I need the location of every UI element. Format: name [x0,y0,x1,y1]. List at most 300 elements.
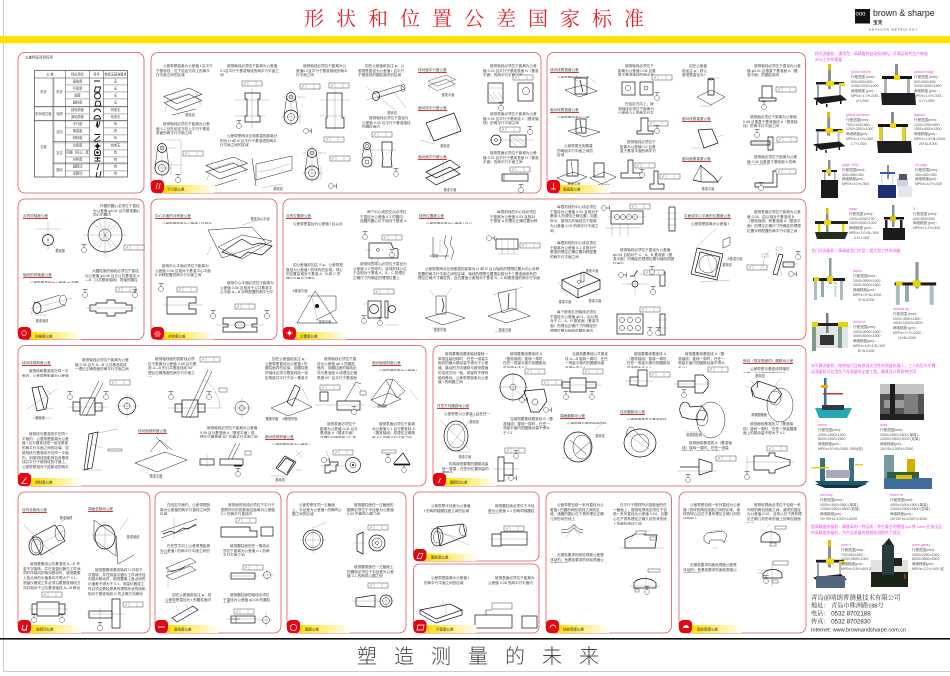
table: 圆跳动 [73,164,82,168]
drawing: connecting rod 1 [281,84,320,134]
drawing: flange [493,448,525,481]
drawing: hatched section [488,75,533,110]
heading and text [22,351,69,377]
table: 无 [114,80,118,84]
drawing: spindle [624,427,656,457]
badge: position: 位置度公差 [300,334,318,338]
specs 13: atlas 行程范围(mm)： 3000×1500×1600 (单臂) - 12000×3500×2000 (双臂) 两维精度(μm)： 15+25L/1000+L/3000 [880,423,920,451]
text: 被测圆锥面任一正截面上的圆周必须位于半径差为公差值 0.1 的两同心圆之间 [347,565,394,578]
drawing: position zone 2: 基准平面 [499,327,511,332]
table: 面轮廓度 [71,114,85,119]
drawing: tilted zone: A基准平面 [728,256,742,261]
badge: perpendicularity [547,180,610,193]
table: 有 [114,128,117,133]
table: 轮廓 [56,111,63,116]
specs 14: mercury 行程范围(mm)： 4000×1600×2800 (单臂) - 12000×2500×2800 (双臂) 两维精度(μm)： 10+25+5L/1000+L/4000 [820,493,860,521]
drawing: wheel [498,369,545,402]
heading and text: 点的位置度公差 [286,214,311,218]
badge: line profile [546,620,609,633]
drawing: plate with circle: 基准轴线 [127,534,140,539]
drawing: curved surface [704,531,728,548]
text: example 3: 被测轴线必须位于距离为公差值 0.2 且在给定方向上平行于基准表面的两平行平面之间 [156,122,210,135]
specs 2: global image 行程范围 (mm)： 500×500×500 - 2000×4000×1500 两维精度 (μm)： MPEe=1.5+L/333 - 4.7+L/250 [914,70,943,102]
machine 3 [813,112,845,153]
table: 全跳动 [73,170,82,176]
heading and text: 任意方向圆跳动公差 [437,404,469,408]
badge: straightness: 直线度公差 [174,626,192,632]
table: 有或无 [111,114,121,119]
drawing: tilted section [200,443,251,476]
text: 被测中心平面必须位于距离为公差值 0.08 且相对于基准中心平面 A 对称配置的两平行平面之间 [155,264,211,277]
drawing: 3D block: 基准平面 [559,299,571,304]
drawing: oblique rod [172,604,198,622]
text: 被测表面必须位于距离为公差值 0.05，由以相对于基准线 B（基准轴线）和基准面 A（基准平面）的理论正确尺寸所确定的理想位置对称配置的两平行平面之间 [747,210,801,233]
specs 15: bravo ht 行程范围(mm)： 4000×1400×1500 (单臂) - 12000×2000×2800 (双臂) 两维精度(μm)： 10+25+5L/1000+L/4000 [890,493,930,521]
heading and text [684,204,732,226]
yellow header band [0,36,950,43]
drawing: plates 2: 基准线 [440,143,451,148]
drawing: cylinder [30,295,72,323]
machine 5 [821,160,838,198]
drawing: 3D block [558,268,601,304]
heading and text [286,204,346,226]
specs 6: xb page 行程范围(mm)： 480×350×300 两维精度(μm)： MPEe=4.0+L/300 [915,163,942,186]
drawing: dome section [761,524,786,547]
drawing: cam [524,380,562,412]
drawing: squares [622,75,672,100]
drawing: cone right lower: 测量圆柱面 [686,432,702,437]
drawing: cone with cylinder: 基准线 [755,373,766,378]
heading and text: 斜向（规定角度的）圆跳动公差 [743,359,793,363]
heading and text [419,204,475,224]
machine 1 [813,64,847,107]
badge: parallelism [151,180,214,193]
drawing: slab [692,129,723,148]
table: 有 [114,135,117,140]
footer rule [0,638,950,640]
drawing: planes with axis: 基准线 [273,186,284,191]
drawing: cylinder on plane: A基准平面 [283,416,297,421]
machine 16 [813,540,847,588]
drawing: shaft with tilted plate [747,247,800,276]
machine 10 [895,262,936,305]
table: 有 [114,170,117,176]
drawing: paired zones [557,160,616,188]
heading and text: 径向圆跳动公差 [620,410,645,414]
badge: symmetry [151,327,214,340]
heading and text [550,58,590,78]
panel: runout [433,346,806,486]
specs 8: X 行程范围 (mm)： 600×800×600 两维精度 (μm)： MPEe=1.2+L/400 [913,207,940,230]
machine 9 [813,258,845,300]
heading and text: 面对线垂直度公差 [550,108,579,112]
drawing: ring on cylinder [562,424,606,462]
drawing: zone 2 [568,119,600,137]
drawing: cylinder on plane [265,384,312,421]
badge: cylindricity: 圆柱度公差 [431,554,449,560]
panel: straightness [155,492,281,633]
heading and text [743,349,793,373]
panel: flatness [414,564,539,633]
specs 4: ligature 行程范围(mm)： 1200×2000×800 - 1500×4000×1500 两维精度(μm)： MPEe=1.8+3L/1000 - 25+5L/1000 [914,113,947,146]
badge: parallelism: 平行度公差 [167,186,185,192]
machine 8 [883,205,905,240]
drawing: disc shaft [87,599,143,630]
badge: roundness: 圆度公差 [305,626,319,632]
logo: brown & sharpe: ooo [856,12,866,18]
drawing: tapered stud 2 [744,446,794,480]
text: 公差带是半径差为公差值 t 的两同轴圆柱面之间的区域 [424,504,471,513]
table: 有 [114,121,117,126]
heading and text: 中心平面的对称度公差 [155,214,191,218]
drawing: tilted cylinder: 基准线 [275,477,286,482]
badge: angularity: 倾斜度公差 [35,480,53,484]
table: 定向 [56,129,63,134]
drawing: plane zone right [371,379,418,408]
drawing: shaft [28,592,68,622]
machine 12 [815,378,852,418]
badge: roundness [287,620,350,633]
heading and text: 平面或中心平面的位置度公差 [684,214,731,218]
specs 17: pmm gantry 行程范围(mm)： 3000×2000×1000 - 8000×3800×2500 两维精度(μm)： MPEe=2.2+L/400 起 [912,543,944,571]
drawing: concentric circle: 基准圆 [55,248,65,253]
table: 位置 [40,144,47,149]
table: 跳动 [56,167,63,172]
text: 被测球的球心必须位于直径为公差值 0.3 的球内，该球的球心位于由相对于基准 A、B、C 的理论正确尺寸所确定的理想位置上 [353,262,407,280]
drawing: stud 2 [650,171,680,189]
drawing: stud [621,160,655,178]
drawing: plane zone right: 基准线 [377,403,388,408]
table: 垂直度 [73,128,83,133]
badge: runout [433,473,496,486]
text: 被测表面必须位于距离为公差值 0.08 的两平行平面内 [488,576,535,585]
drawing: shaft and flange [748,130,797,150]
panel: coaxiality [18,199,144,340]
table: 平面度 [73,86,83,90]
text: 被测要素绕基准轴线旋转一周或连续回转时，在任一测量平面内的最大跳动量不得大于公差值。跳动的方向通常与被测表面的法线方向一致。测量时不得有轴向移动，公差带是距离为公差值 t 的两圆之间 [438,352,488,384]
text: 每根刻线的中心线必须位于直径为公差值 0.05 且相对于基准 A 的理论正确位置，如图所示，被测孔的轴线位于距离为公差值 0.05 的两平行平面之间 [550,205,599,233]
drawing: tilted slab [82,429,122,470]
drawing: tilted zone: 基准线 [35,415,46,420]
photo: atlas [880,384,924,420]
drawing: cone right lower [680,402,725,438]
drawing: curve [561,524,583,537]
drawing: triangle planes: 基准平面 [319,319,331,324]
heading and text [23,263,81,283]
drawing: cylinder on plane [697,78,725,106]
heading and text: 面对面倾斜度公差 [372,361,401,365]
heading and text: plane to line: 面对线平行度公差 [418,106,447,110]
drawing: tilted zone [691,228,742,282]
panel: symbols table [18,52,144,193]
heading and text [265,425,311,445]
drawing: part with frame [235,81,269,128]
drawing: curve zone [161,518,197,538]
heading and text: 线对线倾斜度公差 [22,361,51,365]
heading and text: 点的同轴度公差 [23,214,48,218]
heading [156,58,216,65]
heading and text [155,204,215,224]
drawing: curve profile [430,235,454,260]
drawing: position zone 1: 基准平面 [434,327,446,332]
drawing: 3D block: 基准平面 [586,268,598,273]
drawing: stepped shaft [82,287,138,316]
drawing: paired zones: 基准平面 [598,183,610,188]
badge: surface profile [679,620,742,633]
drawing: tilted zone [27,386,57,420]
heading and text [620,400,670,420]
drawing: section bar [226,609,272,627]
drawing: peg on base [637,118,668,134]
drawing: concentric circle [36,222,65,253]
heading: gantry type: 龙门式测量机：高精度龙门大型、超大型工件的测量 [811,248,900,252]
drawing: 3D tolerance zone: 基准中心平面 [250,216,270,221]
badge: flatness: 平面度公差 [436,626,454,632]
table: 有或无基准要求 [104,72,127,76]
heading and text: 径向全跳动公差 [22,508,47,512]
drawing: triangle planes [293,288,339,324]
text: 被测面绕基准线 C（基准轴线）旋转一周时，在任一测量圆锥面上的跳动量不得大于 0.1 [743,422,797,435]
drawing: round stud [675,367,728,398]
drawing: 3D tolerance zone [207,216,272,259]
table: 平行度 [73,121,83,126]
contact information: 电话： 0532 8702188 [811,610,871,618]
text: 当被测要素绕基准线 B（基准轴线）旋转一周时，在任一测量平面内的圆跳动量不得大于 0.1 [503,417,553,435]
table: 无 [114,94,118,98]
drawing: plates 3: 基准平面 [444,187,456,192]
drawing: block with datum [362,232,402,262]
drawing: tilted zone: 基准线 [722,262,733,267]
drawing: ring on cylinder: 基准线 [595,433,606,438]
drawing: part side view [320,83,350,130]
specs 12: arrow 行程范围(mm)： 2000×1500×1400 - 6000×1500×2500 两维精度(μm)： MPEe=10+5L/1000 /25/5(双) [818,423,863,451]
panel: angularity [18,346,426,486]
drawing: curve profile: A基准 [430,253,439,258]
badge: straightness [155,620,218,633]
table: 特征项目 [71,72,84,76]
machine 17 [871,538,908,587]
heading and text: 面对线倾斜度公差 [265,435,294,439]
heading and text [550,98,592,118]
drawing: tolerance zone 3D [164,88,202,117]
drawing: slab on plane: 基准平面 [702,186,714,191]
drawing: small rod [360,132,398,176]
badge: perpendicularity: 垂直度公差 [563,186,581,192]
heading and text: 轴线的同轴度公差 [23,273,52,277]
table: 定位 [56,150,63,155]
specs 10: lambda sp 行程范围 (mm)： 2000×3500×1500 - 4000×10000×2500 两维精度 (μm)： MPEe=7+7L/1000 - 11+8L/1000 [893,307,923,340]
table: 线轮廓度 [71,107,85,112]
text: 公差带是在同一正截面上，半径差为公差值 t 的两同心圆之间的区域 [292,503,342,516]
drawing: plate with circle [92,518,140,564]
drawing: oblique cylinder: 基准线 [387,110,398,115]
drawing: plates 3 [426,160,460,192]
text: 被测要素绕基准轴线 D 作若干次旋转，并在测量仪器与工件间作径向相对移动时，被测要素上各点间的示值差不得大于 0.1，测量仪器或工件必须沿着轮廓具有理想形状的线和相对于基准轴线 D 的正确方向移动 [88,568,146,596]
drawing: cylinder: 基准轴线 [60,515,73,520]
drawing: step bar [221,518,273,537]
heading and text: 线对面倾斜度公差 [138,429,167,433]
title: 形状和位置公差国家标准 [304,8,656,30]
drawing: plane with zone [135,437,187,478]
drawing: slotted block [158,284,203,314]
drawing: square plate and knob [362,289,399,326]
specs 1: global dense 行程范围 (mm)： 500×500×500 - 1200×2000×1000 两维精度 (μm)： MPEe=1.0+L/330 - 4+L/300 [851,70,880,102]
machine 15 [884,455,932,489]
drawing: hole grid top [602,204,677,236]
drawing: plates 1 [428,75,455,97]
panel: perpendicularity [547,52,806,193]
text: right column 2: 被测表面必须位于距离为公差值 0.05 且平行于基准线 C（基准轴线）的两平行平面之间 [483,112,539,125]
table: 无 [114,86,118,90]
text: 公差带是距离为公差值 t 的两平行平面之间的区域 [424,576,469,585]
text: 被测轴线必须位于直径为公差值 φ0.01 且垂直于基准面 A（基准平面）的圆柱面内 [747,64,801,77]
drawing: taper with circle [352,583,394,608]
heading and text: 面对面垂直度公差 [682,157,711,161]
text: definition: 公差带是距离为公差值 t 且平行于基准线、位于给定方向上的两平行平面之间的区域 [156,64,213,77]
heading and text: 面对线垂直度公差 [682,117,711,121]
drawing: triangle planes: A基准平面 [293,288,307,293]
heading and text: 端面圆跳动公差 [560,414,585,418]
contact information: 青岛前哨朗普测量技术有限公司 [811,592,900,602]
heading and text [560,404,610,424]
badge: line profile: 线轮廓度公差 [563,626,584,632]
drawing: plates [166,558,196,588]
table: 倾斜度 [73,135,83,140]
table: 位置度 [73,142,83,148]
drawing: stepped pin [489,526,529,546]
badge: angularity [18,473,81,486]
contact information: 地址： 青岛市株洲路188号 [811,602,884,610]
right column: machines [811,51,948,634]
table: 同轴（同心）度 [66,150,89,154]
drawing: cone with circle [353,525,388,554]
panel: symmetry [151,199,277,340]
drawing: cylinder [431,524,469,546]
drawing: tolerance zone 3D: 基准线 [185,112,196,117]
drawing: paired zones: 基准平面 [568,181,580,186]
drawing: small stepped shaft [320,450,360,473]
heading and text: 线的位置度公差 [419,214,444,218]
drawing: shaft [559,369,603,400]
drawing: peg [759,86,796,110]
heading: ultra high precision: 超高精度测量机：精度高的一种品质，并在著名的德国 ppt 铁 cmm 应该出品的高精度测量机，为产品质量的规划检测提供了保证 [811,524,942,534]
logo: brown & sharpe: 宝克 [873,19,883,26]
drawing: oblique cylinder [365,81,406,115]
text: 被测面必须位于距离为公差值 0.08 且垂直于基准轴线 A（基准轴线）的两平行平面之间 [743,115,798,128]
text: 公差带是两对互相垂直的距离为 t1 和 t2 且以轴线的理想位置为中心对称配置的两平行平面之间的区域。轴线的理想位置是由相对于三基准面体系的理论正确尺寸确定的，此位置度公差相对于基准 B、C 和基准面的两平行平面 [418,267,540,280]
drawing: tilted cylinder [271,450,302,482]
specs 5: gage 2000 行程范围(mm)： 406×356×300 两维精度(μm)： MPEe=4.0+L/300 [842,163,869,186]
drawing: plates [420,600,462,623]
badge: total runout: 全跳动公差 [36,626,54,632]
machine 6 [878,165,912,198]
text: 每根刻线的中心线必须位于距离为公差值 0.1 且相对于基准的理论正确位置对称配置的两平行平面之间 [550,241,597,259]
badge: surface profile: 面轮廓度公差 [697,626,718,632]
text: cylinder zone: 如在公差值前加注 φ，公差带是直径为公差值 t 且平行于基准线的圆柱面内的区域 [358,64,404,77]
logo: brown & sharpe [855,8,935,32]
drawing: arc section [620,531,664,548]
drawing: connecting rod 2 [152,140,203,182]
drawing: rod with double frames [302,137,350,188]
drawing: cylinder bar [228,565,273,581]
drawing: dome [630,569,660,594]
table [34,70,128,177]
specs 16: pmm c 行程范围(mm)： 700×600×600 - 1200×2800×1000 两维精度(μm)： MPEe=0.8+L/600 起 [841,543,873,571]
drawing: dome with datum [757,561,788,587]
drawing: ring: 基准线 [469,419,480,424]
drawing: tapered stud [677,456,736,482]
drawing: flange shaft [625,370,670,386]
table: 形状 [56,89,63,94]
table: 有 [114,156,117,162]
table: 形状或位置 [36,111,51,116]
drawing: rectangles [475,603,537,628]
machine 11 [812,313,848,351]
text: 被测面的刻线必须位于平行于图样所示的投影面且距离为公差值 0.1 的两平行直线内 [221,503,275,516]
text: right column 1: 被测轴线必须位于距离为公差值 0.03 且平行于基准表面 B（基准平面）的两平行平面之间 [483,64,539,77]
drawing: zone [565,76,597,97]
heading and text [437,394,491,416]
contact information [811,592,906,634]
heading and text: plane to plane: 面对面平行度公差 [418,155,447,159]
table: 有 [114,150,117,154]
drawing: hole grid bottom [617,307,667,336]
slogan: 塑造测量的未来 [357,645,616,668]
text: example 2: 被测轴线必须位于距离为公差值0.2且平行于基准轴线的两平行平面之间 [296,64,348,77]
text: right column 3: 被测表面必须位于距离为公差值 0.01 且平行于基准表面 D（基准平面）的两平行平面之间 [483,151,539,164]
table: 直线度 [73,78,83,84]
panel: surface profile [679,492,806,633]
drawing: ring [300,522,327,553]
table: 无 [114,100,118,104]
text: 公差带是互相垂直的两组平行平面之间的区域 [557,144,593,157]
machine 14 [811,458,869,488]
table: 形状 [40,89,47,94]
drawing: double slot block [210,304,270,332]
logo: brown & sharpe: brown & sharpe [873,8,935,18]
table: 有或无 [111,142,121,148]
drawing: paired tolerance zones [206,157,247,186]
panel: position [283,199,806,340]
drawing: tilted shaft 1 [68,380,139,418]
drawing: plates 2 [420,113,461,148]
badge: total runout [18,620,81,633]
panel: cylindricity [414,492,539,561]
text: 公差带是包络一系列直径为公差值 t 的圆的两包络线之间的区域，诸圆的圆心位于具有理论正确几何形状的线上 [550,503,604,521]
panel: total runout [18,492,150,633]
text: example 1: 被测轴线必须位于距离为公差值0.1且平行于基准轴线的两平行平面之间 [220,64,279,77]
heading and text: 线对线垂直度公差 [550,68,579,72]
text: 被测要素绕公共基准线 A—B 作若干次旋转，并在测量仪器与工件间同时作轴向的相对移动时，被测要素上各点间的示值差均不得大于 0.1，测量仪器或工件必须沿着基准轴线方向并相对于公共基准轴线 A—B 移动 [23,562,80,590]
specs 9: alpha 行程范围(mm)： 2000×3500×1000 - 2500×5000×1500 两维精度(μm)： MPEe=3+4L/1000 - 4+4L/1000 [853,269,883,302]
heading: symbols: 公差特征项目符号 [25,54,53,60]
table: 圆柱度 [73,100,83,104]
drawing: cylinder [24,515,73,555]
panel: parallelism [151,52,541,193]
table: 符号 [93,72,100,76]
drawing: position zone 2 [488,287,530,332]
table: 对称度 [73,156,83,162]
drawing: ring: 基准平面 [459,454,471,459]
table: 圆度 [74,92,81,98]
badge: coaxiality [18,327,81,340]
text: example 4: 公差带是两对互相垂直的距离分别为 t1 和 t2 且平行于基准线的两平行平面之间的区域 [220,134,277,147]
logo: brown & sharpe: HEXAGON METROLOGY [869,28,918,32]
drawing: line block [486,236,540,254]
contact information: 传真： 0532 8702830 [811,618,871,626]
drawing: cone with cylinder: 测量圆锥面 [751,412,767,417]
drawing: tilted plane shaft [315,382,366,414]
